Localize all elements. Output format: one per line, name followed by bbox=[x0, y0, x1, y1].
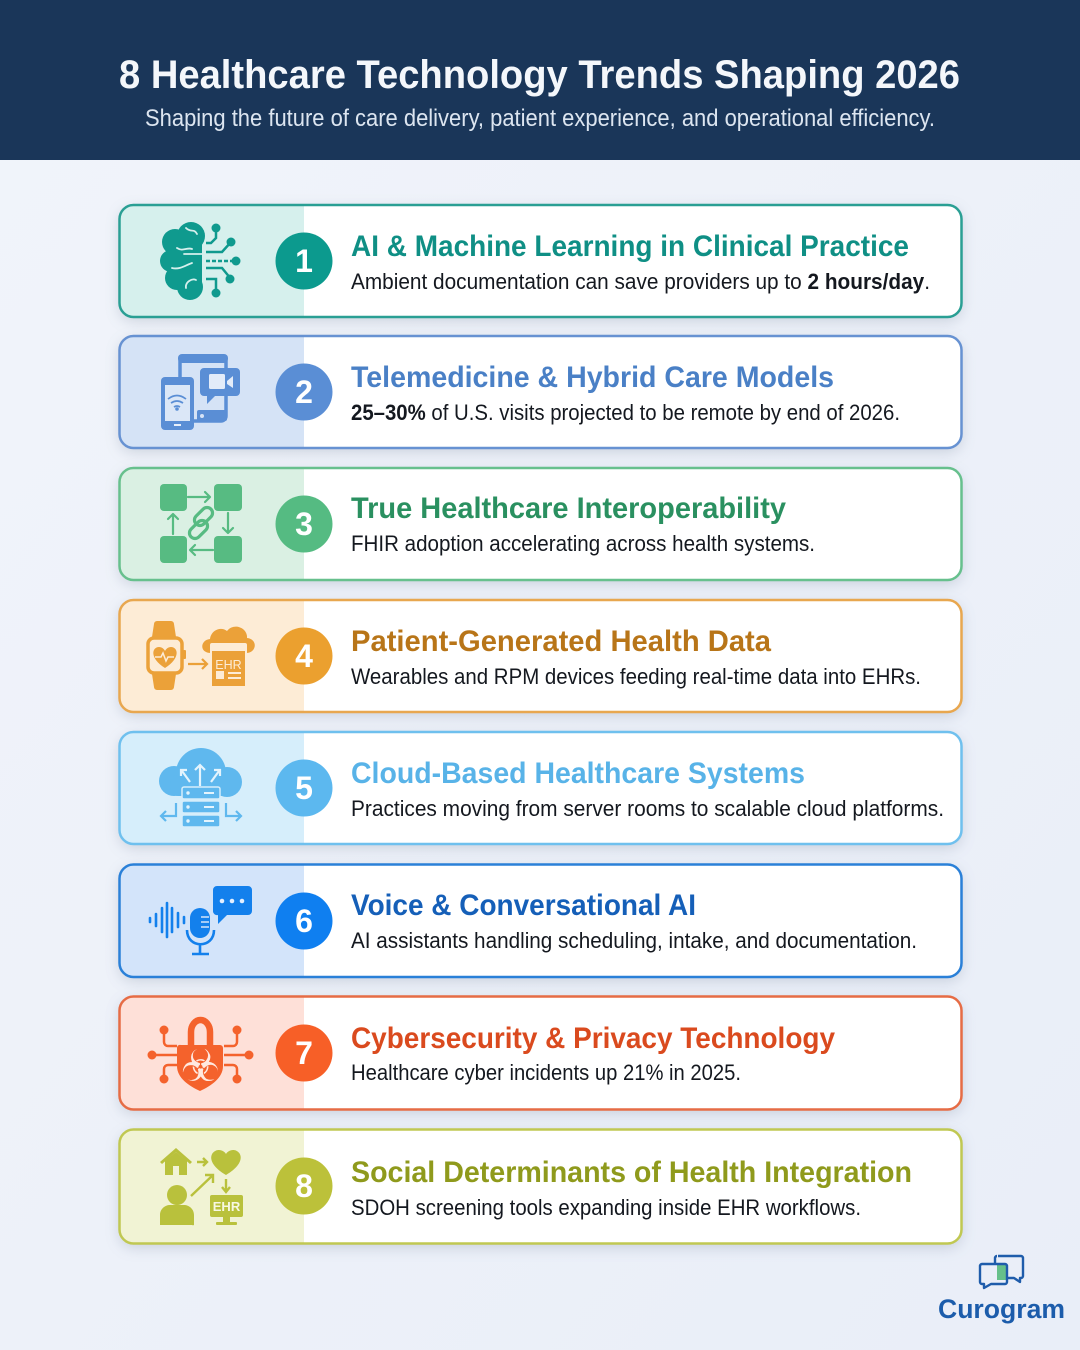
icon: cloud server bbox=[159, 748, 242, 827]
heading and description 5 bbox=[351, 757, 944, 821]
heading and description 7: Healthcare cyber incidents up 21% in 2025. bbox=[351, 1060, 741, 1085]
icon: smartwatch to EHR cloud: EHR bbox=[215, 658, 242, 672]
icon: overlapping chat bubbles bbox=[980, 1256, 1023, 1288]
heading and description 1: Ambient documentation can save providers up to 2 hours/day. bbox=[351, 269, 930, 294]
icon: voice waves, microphone and chat bubble bbox=[150, 886, 252, 954]
title: 8 Healthcare Technology Trends Shaping 2026 bbox=[119, 53, 960, 97]
heading and description 4: Patient-Generated Health Data bbox=[351, 625, 771, 658]
number badge 5 bbox=[276, 760, 332, 816]
icon: padlock shield with biohazard and circuits bbox=[148, 1020, 254, 1092]
heading and description 6: Voice & Conversational AI bbox=[351, 889, 696, 922]
heading and description 7 bbox=[351, 1022, 835, 1085]
panel: trend 6 voice AI bbox=[119, 864, 962, 977]
heading and description 6: AI assistants handling scheduling, intake, and documentation. bbox=[351, 928, 917, 953]
panel: trend 3 interoperability bbox=[119, 468, 962, 580]
number badge 3 bbox=[276, 496, 332, 552]
number badge 7: 7 bbox=[295, 1035, 313, 1071]
heading and description 3: FHIR adoption accelerating across health systems. bbox=[351, 531, 815, 556]
heading and description 8 bbox=[351, 1156, 912, 1220]
icon: smartwatch to EHR cloud bbox=[148, 621, 255, 690]
number badge 8: 8 bbox=[295, 1168, 313, 1204]
number badge 2: 2 bbox=[295, 374, 313, 410]
heading and description 2: 25–30% of U.S. visits projected to be remote by end of 2026. bbox=[351, 400, 900, 425]
number badge 2 bbox=[276, 364, 332, 420]
heading and description 3: True Healthcare Interoperability bbox=[351, 492, 786, 525]
heading and description 1 bbox=[351, 230, 930, 294]
number badge 4: 4 bbox=[295, 638, 313, 674]
panel: trend 4 patient-generated data bbox=[119, 600, 962, 712]
number badge 6 bbox=[276, 892, 332, 950]
panel: trend 5 cloud systems bbox=[119, 732, 962, 844]
number badge 8 bbox=[276, 1158, 332, 1214]
heading and description 2 bbox=[351, 361, 900, 425]
logo: Curogram: Curogram bbox=[938, 1294, 1065, 1324]
panel: trend 1 AI and machine learning bbox=[119, 205, 962, 317]
number badge 5: 5 bbox=[295, 770, 313, 806]
number badge 7 bbox=[276, 1024, 332, 1082]
heading and description 8: SDOH screening tools expanding inside EHR workflows. bbox=[351, 1195, 861, 1220]
number badge 1 bbox=[276, 232, 332, 290]
heading and description 4: Wearables and RPM devices feeding real-time data into EHRs. bbox=[351, 664, 921, 689]
panel: trend 2 telemedicine bbox=[119, 336, 962, 448]
heading and description 4 bbox=[351, 625, 921, 689]
panel: trend 8 social determinants bbox=[119, 1130, 962, 1244]
heading and description 8: Social Determinants of Health Integration bbox=[351, 1156, 912, 1189]
heading and description 3 bbox=[351, 492, 815, 556]
number badge 6: 6 bbox=[295, 903, 313, 939]
heading and description 5: Cloud-Based Healthcare Systems bbox=[351, 757, 805, 790]
icon: linked data blocks bbox=[160, 484, 242, 563]
subtitle: Shaping the future of care delivery, patient experience, and operational efficiency. bbox=[145, 105, 935, 132]
heading and description 1: AI & Machine Learning in Clinical Practice bbox=[351, 230, 909, 263]
header banner bbox=[0, 0, 1080, 160]
icon: brain with circuits bbox=[160, 222, 240, 300]
icon: home, heart, person and EHR monitor bbox=[160, 1148, 243, 1225]
heading and description 7: Cybersecurity & Privacy Technology bbox=[351, 1022, 835, 1055]
logo: Curogram bbox=[938, 1256, 1065, 1324]
icon: tablet, phone and video call bbox=[161, 354, 240, 430]
panel: trend 7 cybersecurity bbox=[119, 996, 962, 1110]
icon: home, heart, person and EHR monitor: EHR bbox=[213, 1199, 241, 1214]
number badge 1: 1 bbox=[295, 243, 313, 279]
heading and description 2: Telemedicine & Hybrid Care Models bbox=[351, 361, 834, 394]
number badge 3: 3 bbox=[295, 506, 313, 542]
number badge 4 bbox=[276, 628, 332, 684]
heading and description 6 bbox=[351, 889, 917, 953]
icon: padlock shield with biohazard and circuits: ☣ bbox=[181, 1041, 220, 1092]
heading and description 5: Practices moving from server rooms to scalable cloud platforms. bbox=[351, 796, 944, 821]
